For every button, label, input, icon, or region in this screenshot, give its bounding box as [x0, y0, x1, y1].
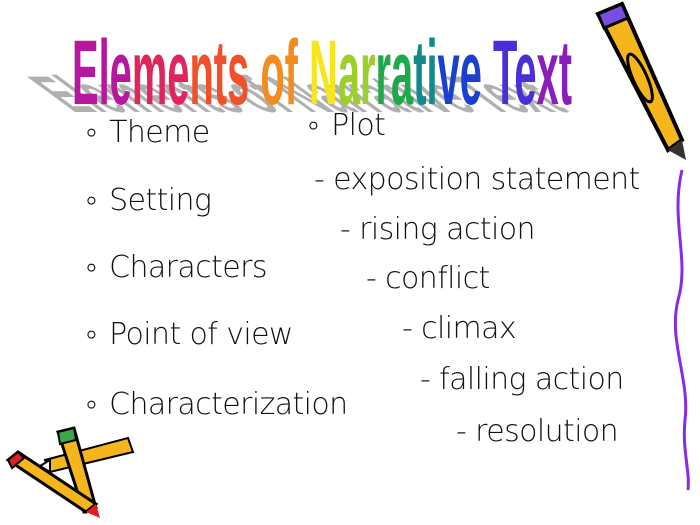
list: plot [304, 108, 640, 449]
item: resolution: - resolution [456, 414, 618, 449]
item: Point of view: ∘ Point of view [82, 317, 293, 352]
icon: pencil top right [595, 1, 690, 490]
item: conflict: - conflict [366, 261, 490, 296]
item: Characters: ∘ Characters [82, 250, 267, 285]
item: Characterization: ∘ Characterization [82, 387, 348, 422]
item: Plot: ∘ Plot [304, 108, 385, 143]
icon: crayons bottom left [6, 426, 134, 518]
item: rising action: - rising action [340, 212, 535, 247]
item: climax: - climax [402, 311, 516, 346]
item: Setting: ∘ Setting [82, 183, 211, 218]
item: exposition: - exposition statement [314, 162, 640, 197]
item: Theme: ∘ Theme [82, 115, 210, 150]
list: left column [82, 115, 348, 422]
item: falling action: - falling action [420, 362, 624, 397]
